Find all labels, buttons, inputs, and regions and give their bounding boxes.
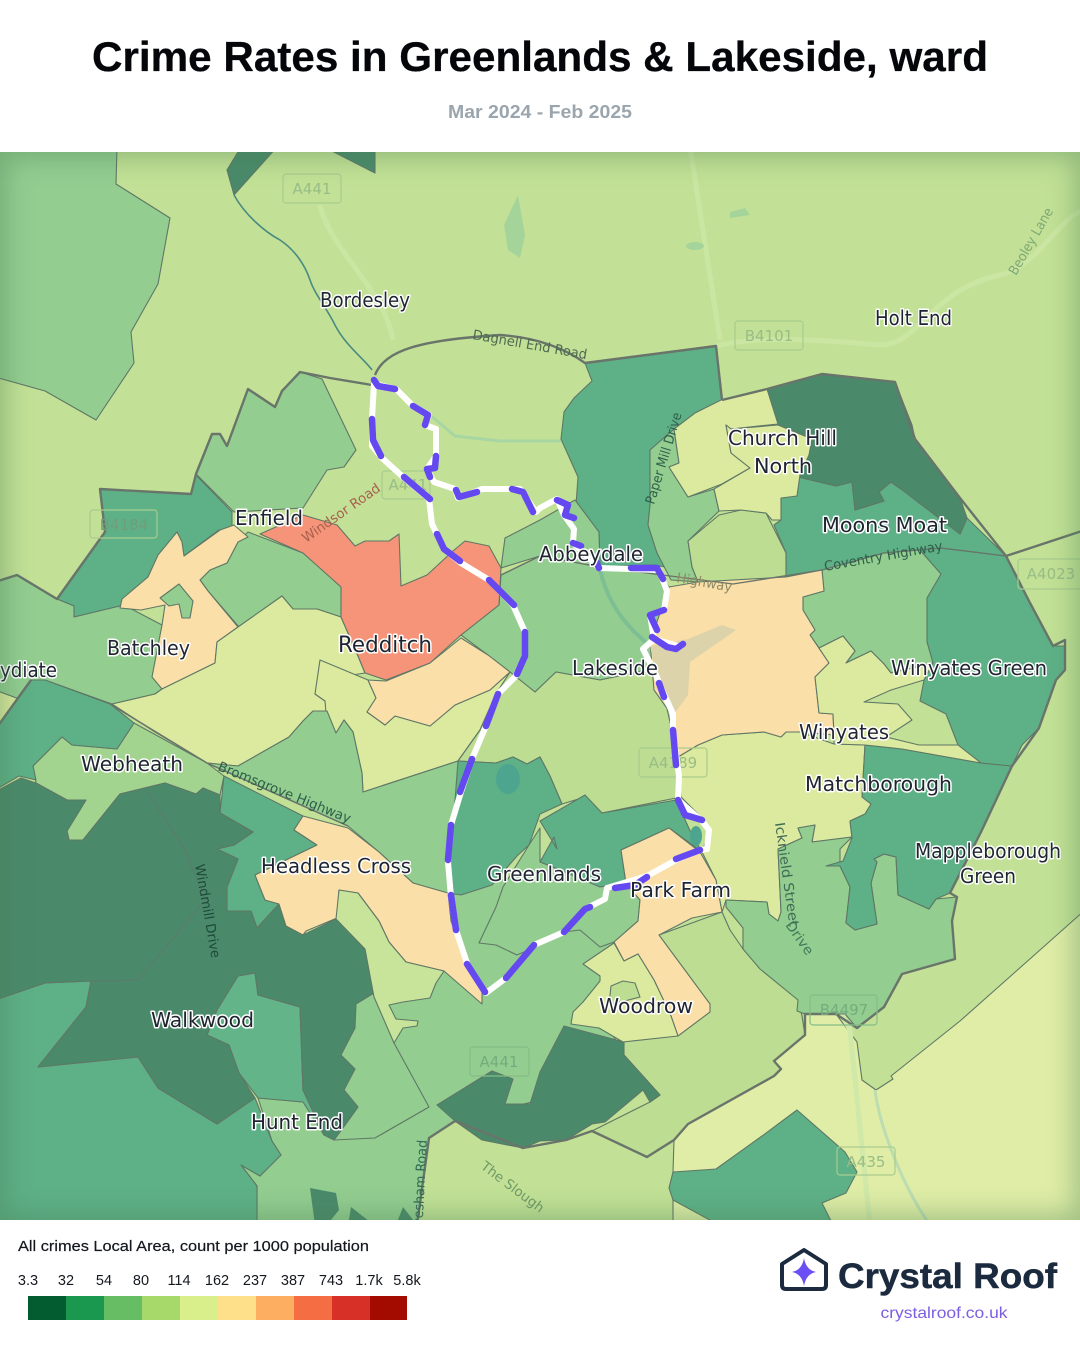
road shields: A4189: [649, 754, 697, 772]
legend tick labels: 114: [167, 1273, 191, 1289]
grey lake in orange area: [650, 625, 736, 714]
place labels: Bordesley: [320, 288, 410, 312]
place labels: Church Hill: [728, 426, 837, 450]
place labels: Greenlands: [487, 862, 601, 886]
legend tick labels: 1.7k: [355, 1273, 383, 1289]
bottom dark pockets: [310, 1188, 413, 1220]
Church Hill east dark forest: [767, 374, 967, 534]
Lakeside north medium: [461, 556, 669, 692]
Headless mid-dark: [217, 776, 317, 928]
subtitle: date range: Mar 2024 - Feb 2025: [448, 102, 632, 122]
Batchley west of Redditch medium: [200, 532, 341, 627]
place labels: Mappleborough: [915, 839, 1061, 863]
legend colour ramp: [28, 1296, 407, 1320]
Woodrow yellow: [571, 943, 678, 1042]
west medium: [0, 576, 162, 704]
place labels: Moons Moat: [822, 513, 947, 537]
street names: Windsor Road: [299, 480, 384, 546]
ward boundary: purple dashes: [372, 380, 702, 992]
west yellow: [112, 596, 365, 766]
bottom-left mid-dark: [0, 981, 281, 1225]
legend: [18, 1238, 421, 1320]
legend tick labels: 387: [281, 1273, 305, 1289]
place labels: Webheath: [81, 752, 183, 776]
legend tick labels: 162: [205, 1273, 229, 1289]
B4184 dark area: [57, 475, 232, 617]
brand name: Crystal Roof: [838, 1257, 1057, 1296]
street names: Evesham Road: [410, 1140, 431, 1234]
NE medium: [803, 548, 941, 673]
Winyates Green dark: [919, 548, 1065, 766]
lakes north: [504, 195, 750, 258]
river Lakeside: [600, 570, 655, 650]
road shields: [90, 174, 1080, 1175]
icon: house with star: [782, 1250, 826, 1289]
around Woodrow: [593, 912, 804, 1130]
Park Farm orange: [614, 828, 722, 1036]
Icknield medium: [726, 825, 957, 1028]
south of Church Hill light: [688, 510, 786, 584]
Greenlands lower: [479, 828, 640, 955]
place labels: [0, 288, 1061, 1134]
south-central medium area: [243, 880, 614, 1220]
legend tick labels: 743: [319, 1273, 343, 1289]
place labels: ydiate: [0, 658, 57, 682]
brand url: crystalroof.co.uk: [880, 1305, 1009, 1322]
legend tick labels: 3.3: [18, 1273, 38, 1289]
street names: Drive: [782, 918, 817, 958]
street names: Highway: [675, 570, 733, 596]
street names: Bromsgrove Highway: [216, 759, 353, 827]
street names: Coventry Highway: [823, 538, 944, 575]
legend tick labels: 237: [243, 1273, 267, 1289]
road shields: B4497: [820, 1001, 868, 1019]
place labels: Park Farm: [630, 878, 731, 902]
Church Hill yellow south: [714, 425, 812, 520]
Matchborough yellow: [678, 732, 871, 921]
street names: Paper Mill Drive: [643, 411, 686, 506]
stream through northern ward: [430, 415, 561, 441]
place labels: Enfield: [235, 506, 303, 530]
ward boundary: Greenlands & Lakeside white line: [372, 383, 709, 993]
place labels: Matchborough: [805, 772, 952, 796]
place labels: Batchley: [107, 636, 190, 660]
street names: [191, 205, 1057, 1234]
south Redditch yellow: [315, 660, 510, 792]
thick admin boundaries: [0, 335, 1080, 1225]
Walkwood inner: [207, 973, 324, 1135]
faint roads: [320, 147, 1080, 346]
place labels: Green: [960, 864, 1016, 888]
Headless Cross orange: [255, 816, 482, 1004]
street names: Windmill Drive: [191, 863, 223, 959]
south-east green blob: [669, 1110, 857, 1225]
Walkwood dark forest: [0, 778, 374, 1140]
Batchley orange: [120, 525, 248, 689]
street names: Icknield Street: [771, 821, 801, 928]
central orange area: [650, 570, 834, 757]
Paper Mill medium: [648, 429, 719, 582]
street names: Dagnell End Road: [471, 327, 588, 363]
Redditch red area: [260, 515, 501, 680]
title: Crime Rates in Greenlands & Lakeside, ward: [92, 33, 988, 80]
road shields: A4023: [1027, 565, 1075, 583]
Webheath light medium: [33, 723, 224, 840]
road shields: B4184: [100, 516, 148, 534]
Winyates yellow: [815, 636, 981, 763]
Matchborough east dark: [826, 745, 1012, 930]
Moreton stream: [234, 195, 372, 370]
Lakeside south light: [458, 670, 681, 813]
place labels: Walkwood: [151, 1008, 254, 1032]
place labels: Headless Cross: [261, 854, 411, 878]
Moons Moat dark: [774, 477, 1006, 577]
legend tick labels: 5.8k: [393, 1273, 421, 1289]
road shields: A441: [480, 1053, 518, 1071]
place labels: Redditch: [338, 633, 432, 658]
place labels: Lakeside: [572, 656, 658, 680]
legend tick labels: 54: [96, 1273, 112, 1289]
place labels: Winyates: [799, 720, 889, 744]
legend title: All crimes Local Area, count per 1000 population: [18, 1238, 369, 1255]
legend tick labels: 80: [133, 1273, 149, 1289]
Greenlands upper dark ring: [540, 795, 702, 887]
yellow strip south of Headless: [336, 890, 444, 1043]
place labels: Woodrow: [599, 994, 693, 1018]
road shields: A441: [389, 476, 427, 494]
south-east pale area: [673, 910, 1080, 1225]
west mid-dark band: [0, 680, 134, 790]
place labels: North: [754, 454, 812, 478]
road shields: A441: [293, 180, 331, 198]
place labels: Hunt End: [251, 1110, 343, 1134]
place labels: Winyates Green: [891, 656, 1047, 680]
place labels: Abbeydale: [539, 542, 643, 566]
Greenlands NW dark: [448, 757, 562, 895]
Church Hill yellow west: [669, 389, 778, 497]
SE dark forest: [437, 1026, 660, 1148]
road shields: B4101: [745, 327, 793, 345]
road shields: A435: [847, 1153, 885, 1171]
north-central: Enfield north: [196, 372, 356, 512]
Redditch south orange: [367, 638, 510, 726]
place labels: Holt End: [875, 306, 952, 330]
legend tick labels: 32: [58, 1273, 74, 1289]
north of ward centre: Paper Mill area: [561, 346, 722, 568]
street names: Beoley Lane: [1006, 205, 1057, 278]
street names: The Slough: [477, 1158, 547, 1216]
low-crime areas: north-west field: [0, 147, 375, 420]
Redditch south medium-green: [207, 711, 470, 893]
legend tick labels: [18, 1273, 421, 1289]
Icknield road faint over pale area: [840, 1014, 872, 1220]
Abbeydale medium: [501, 500, 600, 568]
logo: Crystal Roof: [782, 1250, 1057, 1322]
